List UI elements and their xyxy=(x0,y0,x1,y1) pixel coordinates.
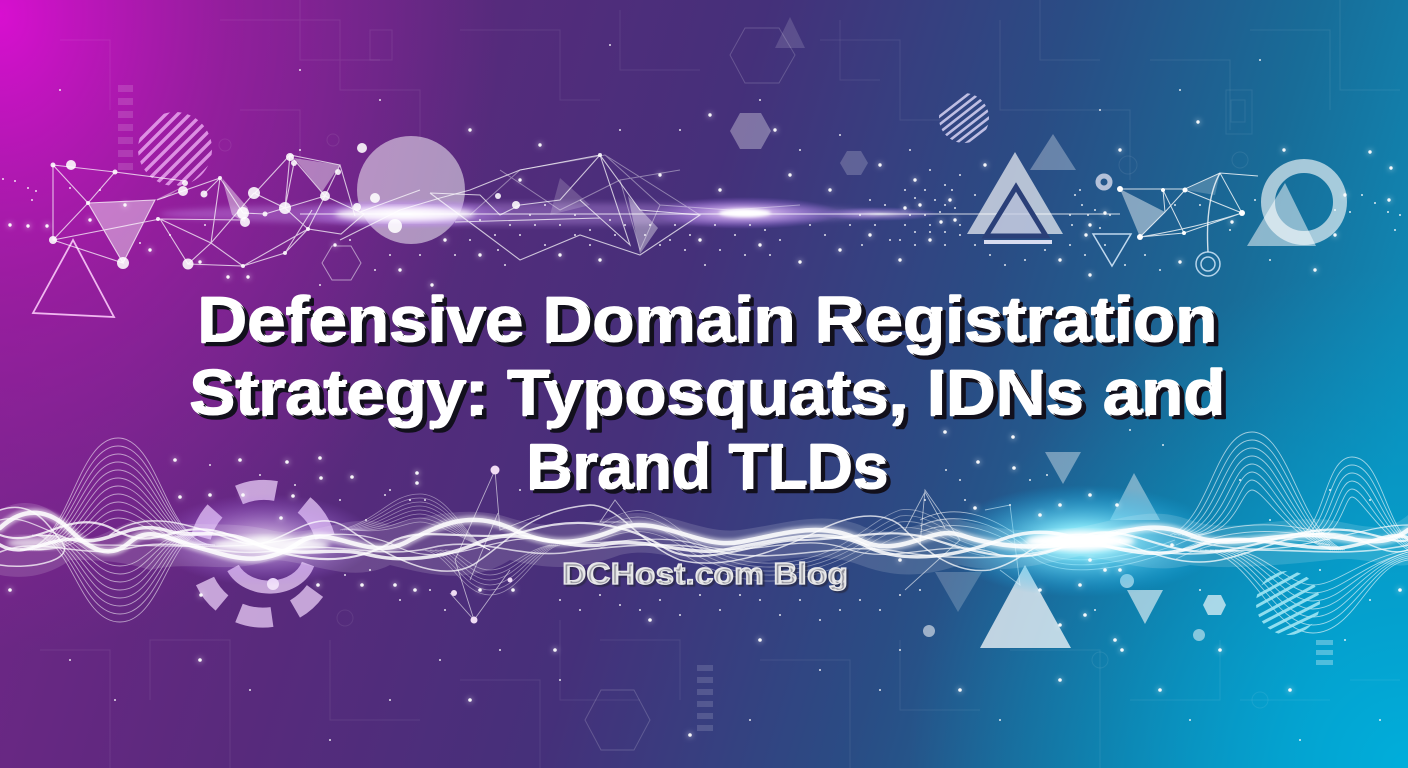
left network graph xyxy=(49,143,700,270)
title: Strategy: Typosquats, IDNs and xyxy=(190,357,1226,429)
light streak upper band xyxy=(160,197,1120,229)
large translucent circle xyxy=(357,136,465,244)
ribbon bright cores xyxy=(7,532,1135,553)
left outline triangle xyxy=(33,240,114,317)
wave family middle mesh xyxy=(340,494,985,595)
lower-left node graph xyxy=(450,466,1020,624)
pendant ring xyxy=(1196,252,1220,276)
upper particles xyxy=(3,45,1400,285)
hatched circle cyan xyxy=(1256,571,1320,635)
title: Defensive Domain Registration xyxy=(198,284,1218,356)
hatched circle right xyxy=(939,93,989,143)
large triangle cluster right xyxy=(967,134,1076,242)
lower right shapes xyxy=(923,452,1226,648)
small ring node xyxy=(1098,176,1110,188)
filled hexagons xyxy=(730,113,868,175)
decorative bar stacks xyxy=(118,85,1333,731)
wave family left hills xyxy=(20,438,215,622)
top decorative triangle xyxy=(775,17,805,48)
decorative outline hexagons xyxy=(322,28,795,750)
big ring with triangle xyxy=(1247,166,1340,246)
white ribbon waveform xyxy=(0,505,1408,571)
center network graph xyxy=(470,155,800,254)
title xyxy=(190,284,1226,503)
inverted triangle outline xyxy=(1093,234,1131,266)
subtitle: DCHost.com Blog: DCHost.com Blog xyxy=(562,556,848,591)
hatched circle left xyxy=(138,112,212,186)
gear shape xyxy=(201,490,325,618)
lower particles xyxy=(10,430,1400,740)
translucent ribbon body xyxy=(0,503,1408,577)
wave family right hills xyxy=(920,432,1408,633)
right network graph xyxy=(1117,173,1258,252)
title: Brand TLDs xyxy=(527,431,889,503)
lower band glows xyxy=(155,485,1222,597)
